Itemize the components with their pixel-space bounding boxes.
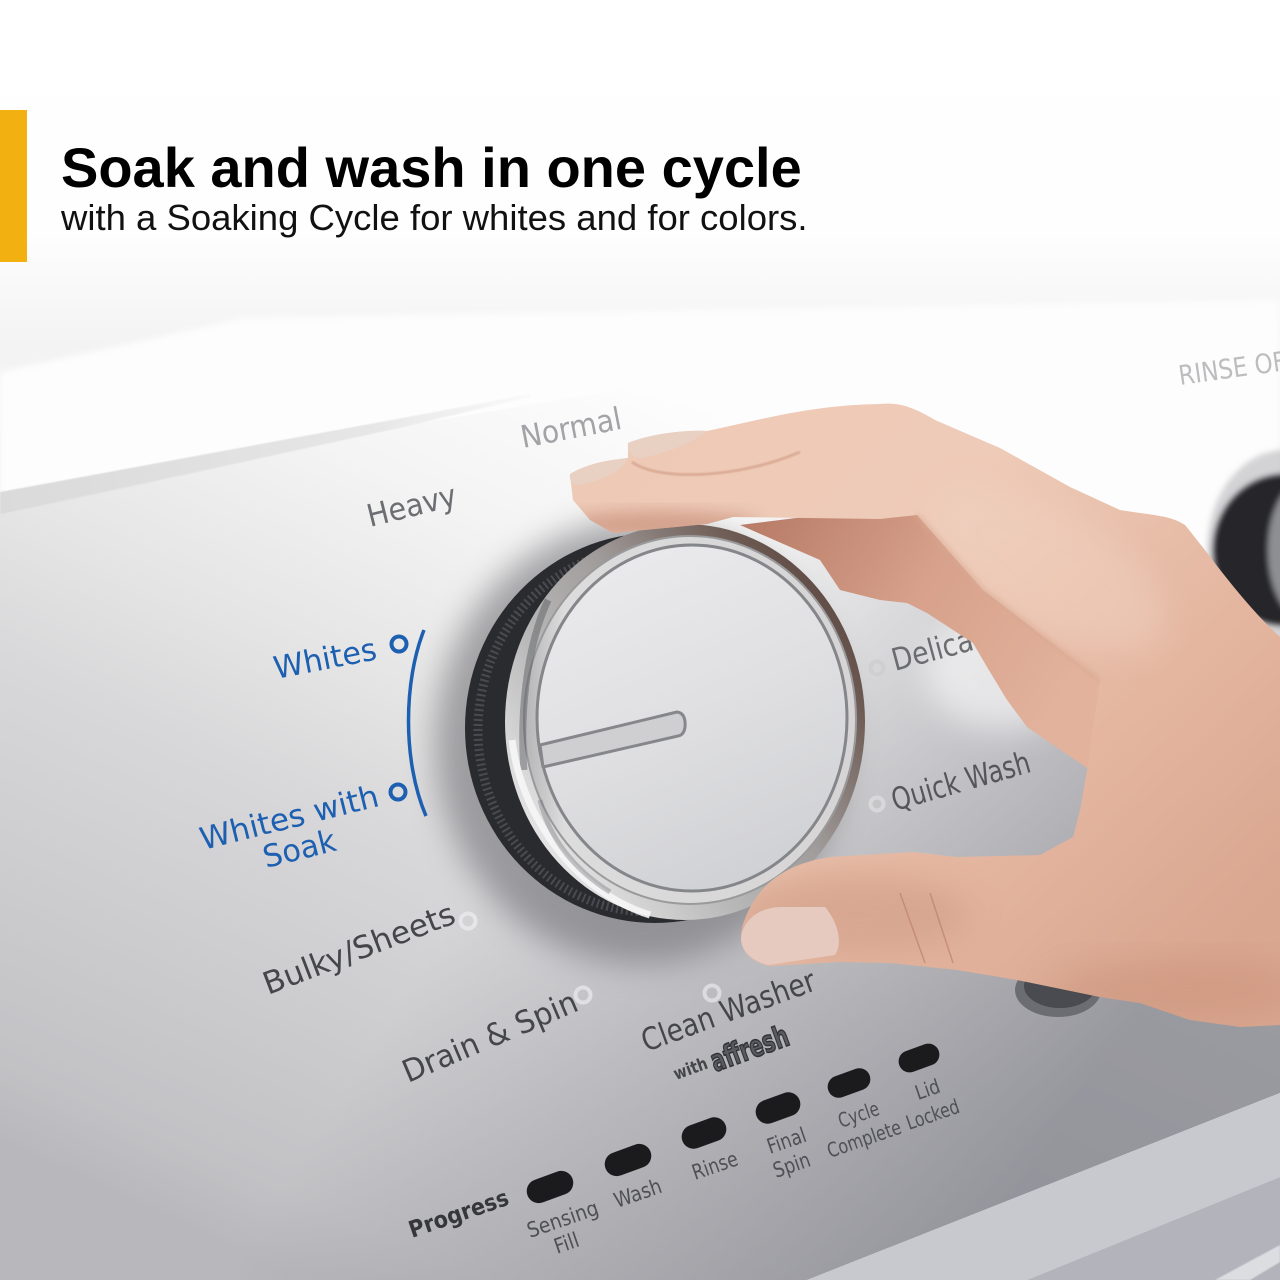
headline block: with a Soaking Cycle for whites and for colors. xyxy=(61,197,808,238)
cycle labels: Bulky/Sheets xyxy=(258,896,460,1002)
progress indicator lights and labels: Wash xyxy=(611,1174,665,1213)
progress indicator lights and labels: Cycle xyxy=(835,1096,882,1133)
cycle labels: Soak xyxy=(259,823,340,876)
cycle labels: Whites with xyxy=(196,779,382,858)
third finger behind the dial xyxy=(740,505,1130,770)
cycle labels: Drain & Spin xyxy=(397,984,583,1090)
progress indicator lights and labels: Final xyxy=(764,1123,809,1159)
second knob at right edge xyxy=(1207,450,1280,650)
yellow accent bar xyxy=(0,110,27,262)
progress indicator lights and labels: Rinse xyxy=(689,1147,741,1185)
main dial knob xyxy=(465,524,865,923)
progress indicator lights and labels xyxy=(405,1040,963,1259)
headline block xyxy=(61,136,808,238)
small dark button under the thumb xyxy=(1015,963,1101,1017)
cycle labels: Whites xyxy=(271,632,380,687)
cycle labels: Delica xyxy=(888,622,977,679)
progress indicator lights and labels: Locked xyxy=(903,1094,963,1135)
silver control panel xyxy=(0,390,1280,1280)
hand turning the dial xyxy=(560,404,1280,1027)
headline block: Soak and wash in one cycle xyxy=(61,136,802,199)
cycle indicator rings and blue bracket xyxy=(390,630,884,1002)
dial pointer xyxy=(540,712,685,767)
cycle labels: Quick Wash xyxy=(887,745,1035,819)
progress indicator lights and labels: Progress xyxy=(405,1185,512,1244)
progress indicator lights and labels: Complete xyxy=(824,1115,904,1163)
cycle labels: Clean Washer xyxy=(636,963,821,1060)
cycle labels xyxy=(196,346,1280,1090)
cycle labels: with xyxy=(671,1054,711,1085)
knob shadow halo xyxy=(435,520,845,964)
progress indicator lights and labels: Lid xyxy=(912,1074,943,1105)
progress indicator lights and labels: Spin xyxy=(770,1148,814,1183)
washer control panel photo scene xyxy=(0,296,1280,1280)
cycle labels: affresh xyxy=(706,1019,794,1080)
progress indicator lights and labels: Fill xyxy=(551,1228,582,1259)
fingernails xyxy=(628,431,707,458)
cycle labels: Normal xyxy=(518,401,625,456)
cycle labels: Heavy xyxy=(363,478,460,535)
progress indicator lights and labels: Sensing xyxy=(524,1196,602,1243)
